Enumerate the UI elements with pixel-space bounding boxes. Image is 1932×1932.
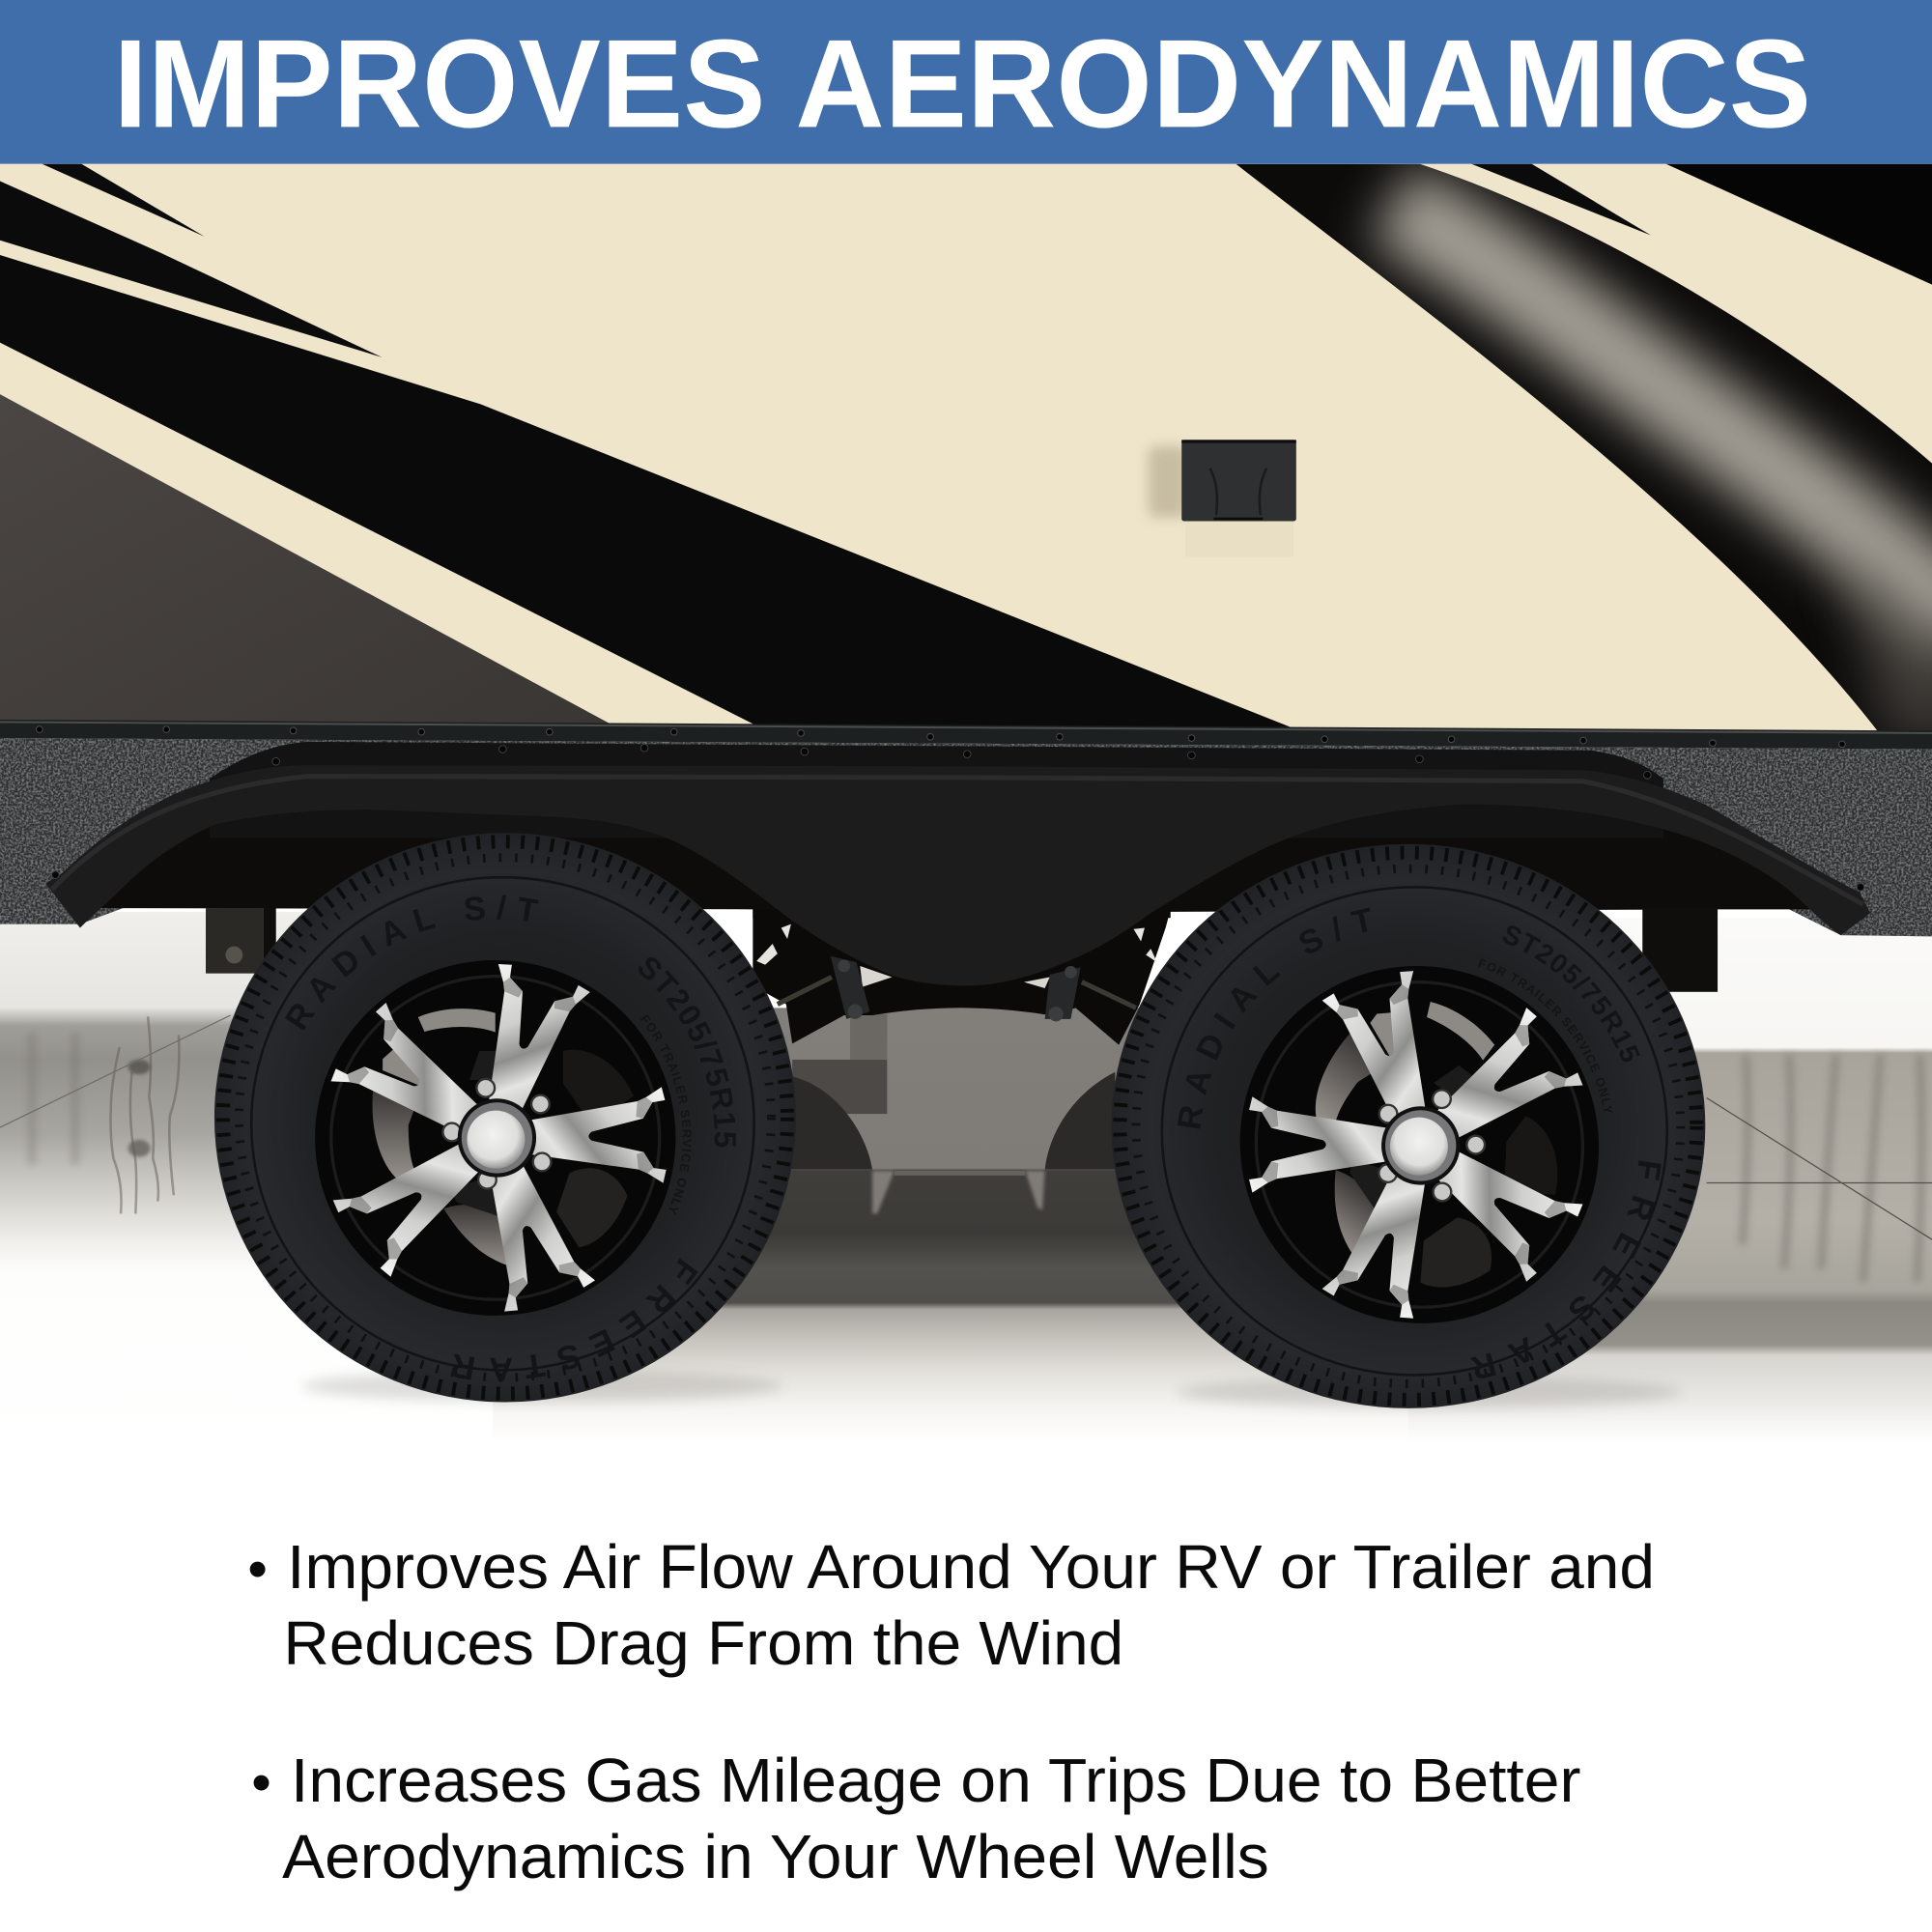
tire body: [1112, 844, 1705, 1408]
sidewall lettering: [285, 895, 736, 1381]
vertical streaks right: [1743, 1055, 1921, 1282]
title: IMPROVES AERODYNAMICS: [113, 13, 1811, 154]
wheel: left tire and rim: [214, 833, 796, 1403]
decal: small top-left spike: [42, 164, 205, 237]
sidewall lettering: FREESTAR: [453, 1258, 697, 1381]
sidewall lettering: FOR TRAILER SERVICE ONLY: [640, 1014, 692, 1215]
floor tile lines right: [1707, 1097, 1932, 1239]
beige wall: [0, 164, 1932, 743]
panel: garage floor: [0, 912, 1932, 1448]
bullet two: Aerodynamics in Your Wheel Wells: [282, 1822, 1269, 1891]
alloy rim: [315, 960, 675, 1316]
wheel: right tire and rim: [1111, 844, 1706, 1408]
wheel spoke slots right: [1133, 927, 1157, 962]
sidewall lettering: FOR TRAILER SERVICE ONLY: [1478, 958, 1613, 1113]
fender lip highlight: [52, 777, 1863, 904]
oil smudge lower: [128, 1140, 151, 1157]
fender: tandem axle fender skirt: [45, 742, 1870, 985]
decal: top right spike: [1471, 164, 1651, 236]
panel: RV side graphics: [0, 164, 1932, 743]
pale wide streaks left: [32, 1033, 75, 1164]
tire contact shadow left: [301, 1370, 782, 1403]
reflection: dark wall block: [792, 1060, 887, 1114]
panel: textured lower skirt: [0, 738, 1932, 936]
reflection notch left: [872, 1171, 895, 1213]
text block: benefits list: [247, 1532, 1655, 1891]
decal: grey triangle: [0, 394, 616, 727]
axle and equalizer mass: [753, 909, 1171, 1045]
sidewall lettering: [1178, 908, 1662, 1378]
rail: black trim rail with screws: [0, 720, 1932, 750]
bullet one: [247, 1532, 1655, 1678]
bullet two: •: [251, 1751, 271, 1814]
leaf spring bars: [778, 977, 1136, 1008]
light gap left: [860, 966, 892, 987]
sidewall lettering: RADIAL S/T: [1178, 908, 1370, 1128]
floor centre: [493, 1008, 1408, 1441]
light gap right: [1024, 977, 1050, 988]
tire shoulder line: [251, 877, 754, 1370]
tire tread notches outer: [1120, 853, 1696, 1400]
decal: right swoosh: [1233, 164, 1932, 743]
bullet two: [251, 1746, 1580, 1891]
tire tread notches inner: [239, 858, 771, 1378]
reflection: pillar: [850, 1014, 887, 1060]
wheel well cavity: [96, 801, 1821, 918]
decal: main black band: [0, 255, 1290, 727]
reflected fender arch right: [1045, 1072, 1115, 1169]
tire shoulder line: [1162, 887, 1667, 1375]
decal: top right corner: [1665, 164, 1932, 285]
floor tile line left: [0, 1015, 231, 1127]
bullet two: Increases Gas Mileage on Trips Due to Better: [291, 1746, 1580, 1815]
icon: wall vent cover: [1144, 440, 1296, 523]
bullet one: Improves Air Flow Around Your RV or Trailer and: [287, 1532, 1655, 1602]
decal: long upper-left spike: [0, 182, 382, 357]
right shackle: [1045, 966, 1081, 1021]
tire tread notches inner: [1136, 868, 1681, 1383]
floor right: [1408, 918, 1932, 1448]
bullet one: Reduces Drag From the Wind: [283, 1608, 1123, 1678]
tire contact shadow right: [1177, 1377, 1682, 1408]
sidewall lettering: ST205/75R15: [639, 957, 736, 1148]
fender flange: [210, 742, 1663, 838]
reflected fender arch left: [788, 1076, 872, 1169]
floor left: [0, 912, 493, 1441]
header banner: [0, 0, 1932, 164]
right hanger bracket: [1642, 908, 1718, 992]
tire tread notches outer: [223, 841, 787, 1394]
wheel spoke slots left: [756, 924, 791, 965]
sidewall lettering: FREESTAR: [1470, 1161, 1662, 1378]
sidewall lettering: ST205/75R15: [1503, 925, 1640, 1063]
fender bolts: [52, 744, 1864, 891]
water drips left: [110, 1016, 179, 1213]
left hanger bracket: [206, 908, 276, 974]
panel: chassis and suspension: [96, 801, 1821, 1045]
oil smudge: [128, 1060, 151, 1074]
alloy rim: [1169, 895, 1670, 1395]
banner background: [0, 0, 1932, 164]
sidewall lettering: RADIAL S/T: [285, 895, 539, 1030]
tire body: [214, 833, 796, 1403]
reflection notch right: [1025, 1171, 1045, 1210]
left shackle: [831, 956, 870, 1019]
reflection centre patch: [895, 1171, 1025, 1176]
fender body: [45, 765, 1870, 985]
bullet one: •: [247, 1538, 268, 1601]
